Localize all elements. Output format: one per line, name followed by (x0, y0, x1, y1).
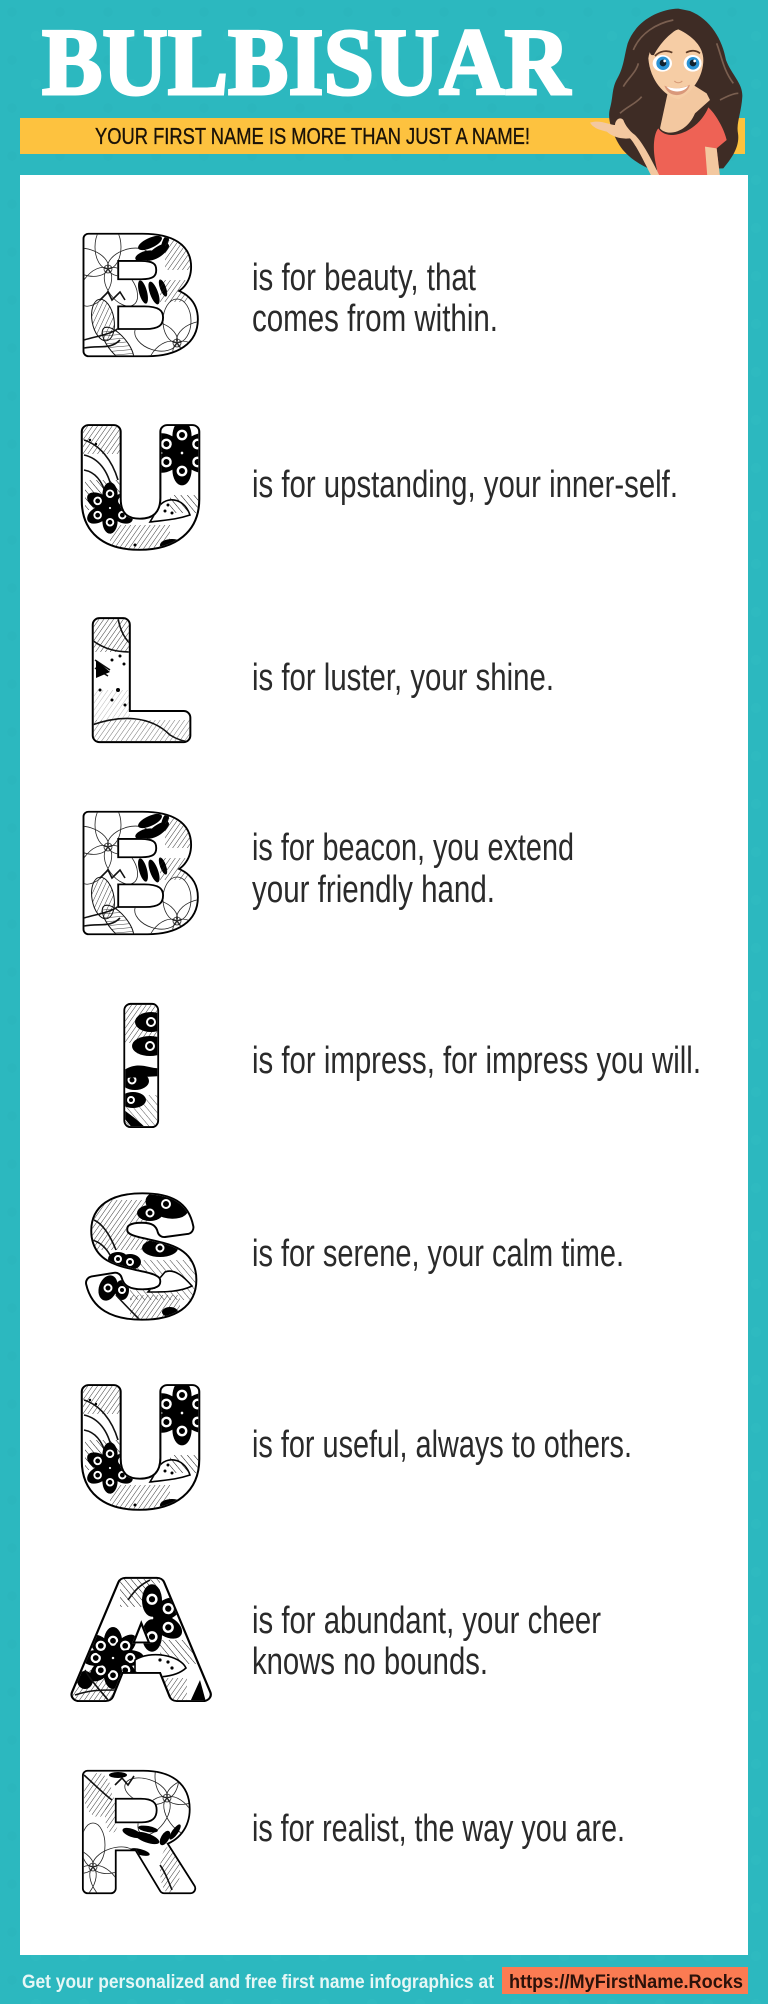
text: is for realist: is for realist, the way you are. (252, 1808, 625, 1850)
title: BULBISUAR (42, 9, 571, 115)
text: is for abundant: is for abundant, your cheer (252, 1600, 601, 1642)
icon: zentangle letter B: B (77, 781, 201, 965)
icon: zentangle letter U (80, 1384, 200, 1511)
icon: zentangle letter I: I (120, 976, 162, 1155)
text: is for useful: is for useful, always to others. (252, 1424, 632, 1466)
icon: zentangle letter A: A (74, 1549, 208, 1729)
row: R for realist (82, 1770, 622, 1894)
row: U for upstanding (80, 424, 676, 551)
footer url badge: https://MyFirstName.Rocks (509, 1972, 743, 1993)
icon: zentangle letter R (82, 1770, 196, 1894)
text: is for beauty (252, 257, 498, 340)
icon: zentangle letter B: B (77, 781, 201, 965)
icon: zentangle letter L (92, 617, 192, 744)
icon: zentangle letter U: U (78, 398, 203, 576)
text: is for beauty: comes from within. (252, 298, 498, 340)
icon: zentangle letter L: L (88, 591, 189, 770)
text: is for beacon (252, 827, 574, 911)
text: is for luster: is for luster, your shine. (252, 657, 554, 699)
subtitle banner: YOUR FIRST NAME IS MORE THAN JUST A NAME! (95, 123, 530, 149)
row: B for beauty (82, 232, 496, 358)
icon: zentangle letter U: U (78, 398, 203, 576)
icon: zentangle letter S: S (88, 1168, 196, 1346)
row: S for serene (85, 1192, 622, 1321)
icon: zentangle letter U: U (78, 1358, 203, 1536)
icon: zentangle letter B: B (77, 203, 201, 387)
icon: zentangle letter L: L (88, 591, 189, 770)
row: U for useful (80, 1384, 630, 1511)
icon: zentangle letter U: U (78, 1358, 203, 1536)
icon: zentangle letter I (123, 1002, 160, 1128)
icon: zentangle letter A: A (74, 1549, 208, 1729)
text: is for serene: is for serene, your calm time. (252, 1233, 624, 1275)
footer call to action: Get your personalized and free first name infographics at (22, 1972, 495, 1993)
row: B for beacon (82, 810, 572, 936)
text: is for beacon: is for beacon, you extend (252, 827, 574, 869)
icon: zentangle letter U (80, 424, 200, 551)
icon: zentangle letter R: R (77, 1739, 194, 1924)
row: L for luster (92, 617, 552, 744)
subtitle banner (20, 118, 745, 154)
row: A for abundant (70, 1576, 601, 1702)
text: is for beacon: your friendly hand. (252, 869, 495, 911)
icon: zentangle letter B: B (77, 203, 201, 387)
icon: zentangle letter A (70, 1576, 212, 1702)
icon: zentangle letter B (82, 810, 199, 936)
icon: zentangle letter I: I (120, 976, 162, 1155)
text: is for beauty: is for beauty, that (252, 257, 476, 299)
row: I for impress (123, 1002, 698, 1128)
text: is for abundant (252, 1600, 601, 1683)
text: is for abundant: knows no bounds. (252, 1641, 488, 1683)
icon: zentangle letter S: S (88, 1168, 196, 1346)
icon: zentangle letter R: R (77, 1739, 194, 1924)
illustration: smiling woman with open hand (590, 9, 742, 177)
icon: zentangle letter B (82, 232, 199, 358)
